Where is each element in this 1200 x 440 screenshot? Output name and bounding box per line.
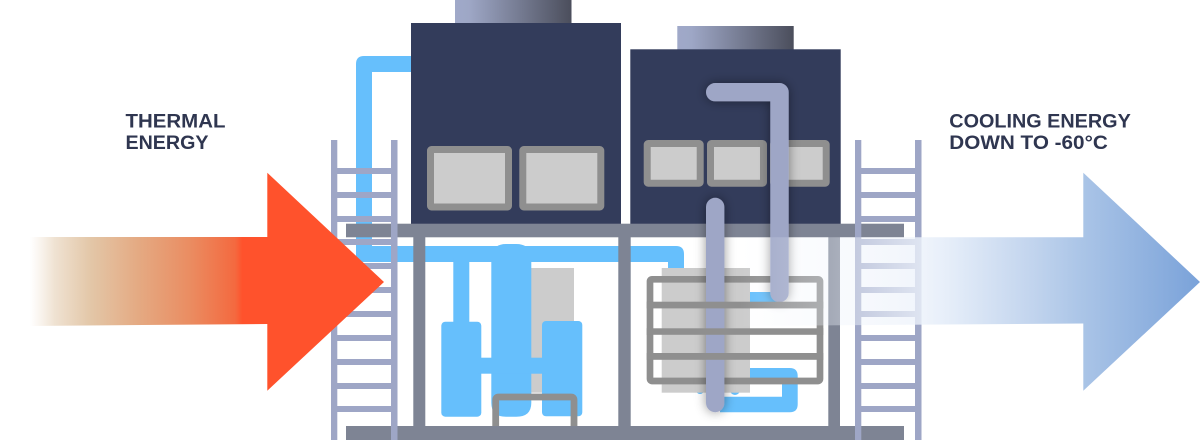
condenser: coil frame outline <box>650 279 820 381</box>
label: cooling energy: DOWN TO -60°C <box>949 132 1108 154</box>
evaporator: grey housing behind compressor <box>531 268 574 393</box>
cabinet: right <box>630 49 841 224</box>
cabinet: left <box>411 23 621 224</box>
pipe: blue return loop <box>696 292 798 412</box>
compressor assembly: blue tanks and column <box>441 244 582 417</box>
label: thermal energy: THERMAL <box>126 110 226 132</box>
frame: steel beams and columns <box>346 224 904 440</box>
condenser: grey housing <box>662 268 750 393</box>
arrow: cooling energy output <box>740 173 1200 391</box>
panel: right cabinet window 3 <box>774 144 826 183</box>
pipes: grey-blue refrigerant lines <box>715 92 780 403</box>
panel: right cabinet window 2 <box>710 144 764 183</box>
condenser: coil cross bars <box>647 302 823 360</box>
panel: left cabinet window 2 <box>523 150 601 207</box>
bracket: grey pump stand <box>496 397 574 426</box>
arrow: thermal energy input <box>30 173 384 391</box>
ladder: left <box>331 140 398 440</box>
ladder: right <box>855 140 922 440</box>
label: cooling energy: COOLING ENERGY <box>949 110 1131 132</box>
panel: left cabinet window 1 <box>430 150 508 207</box>
label: thermal energy: ENERGY <box>126 132 208 154</box>
cap: right cabinet vent <box>677 26 794 50</box>
pipe: blue coolant line <box>356 56 684 280</box>
cap: left cabinet vent <box>455 0 572 23</box>
panel: right cabinet window 1 <box>647 144 700 183</box>
